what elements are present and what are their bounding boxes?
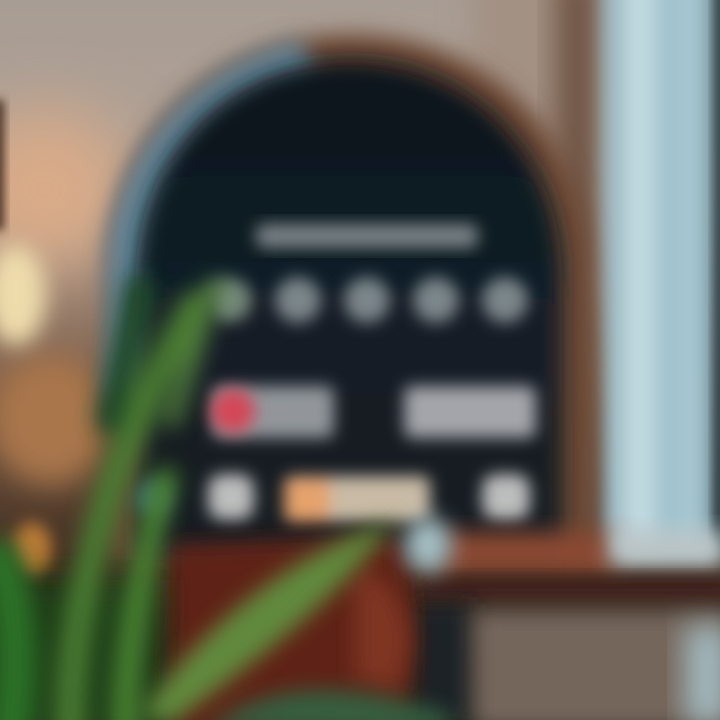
row of round icons <box>208 277 528 323</box>
board content <box>134 224 536 522</box>
shelf and table <box>410 530 720 720</box>
large leaf <box>140 520 395 720</box>
window curtain <box>602 0 720 555</box>
dark foliage mass <box>0 580 160 720</box>
bottom leaf <box>205 690 450 720</box>
arch board dark panel <box>136 60 562 560</box>
green plant <box>0 285 450 720</box>
red button icon <box>211 389 255 433</box>
lower icon row <box>134 474 530 522</box>
pale vase <box>404 517 452 573</box>
red armchair <box>165 535 414 720</box>
right button <box>404 386 536 438</box>
left button <box>212 386 334 438</box>
heading bar <box>256 224 478 248</box>
warm lamp glow <box>0 100 130 578</box>
arch board frame <box>106 34 590 560</box>
